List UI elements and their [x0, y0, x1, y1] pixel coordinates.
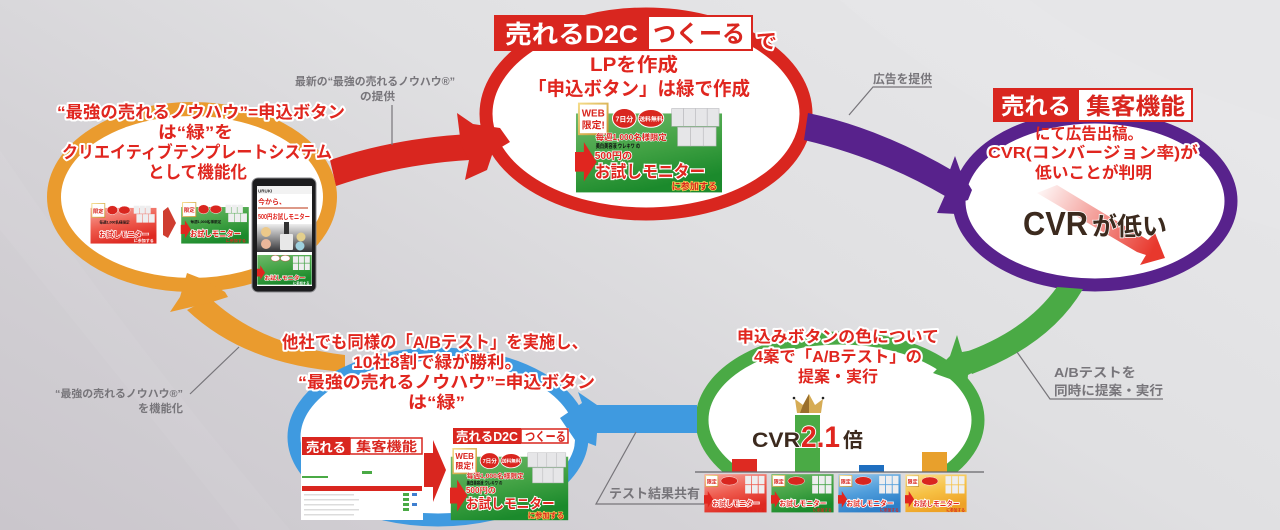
ad card: green in blue panel: 送料無料 — [502, 458, 521, 465]
arrow: screenshot to LP — [424, 440, 446, 502]
ad card: red variant — [704, 474, 767, 513]
text: green panel — [737, 327, 939, 386]
ad card: orange variant — [905, 474, 967, 512]
annotation: simultaneous A/B test — [1017, 352, 1163, 399]
ad card: green in blue panel: 500円の — [466, 486, 496, 495]
panel: shukyaku kino screenshot: 集客機能 — [356, 439, 417, 454]
panel: red ellipse — [486, 14, 806, 214]
ad card: green large: 送料無料 — [639, 115, 663, 123]
arrow: orange, blue panel to orange panel — [170, 273, 345, 372]
ad card: red before: お試しモニター — [99, 229, 149, 239]
arrow: blue, green panel to blue panel — [560, 392, 697, 472]
ad card: orange variant: お試しモニター — [913, 499, 960, 508]
ad card: green large: お試しモニター — [595, 163, 705, 182]
text: CVR 2.1x: CVR — [752, 429, 800, 452]
ad card: green variant: 限定 — [774, 478, 784, 485]
panel: blue ellipse — [294, 354, 582, 520]
ad card: blue variant: お試しモニター — [846, 499, 893, 508]
panel: green ellipse — [697, 332, 984, 472]
icon: downward arrow — [1037, 185, 1165, 265]
text: orange panel: “最強の売れるノウハウ”=申込ボタン — [57, 102, 345, 122]
text: blue panel — [282, 333, 595, 412]
panel: orange ellipse — [54, 109, 330, 285]
text: purple panel: にて広告出稿。 — [1035, 125, 1143, 143]
heading: D2C tsukuru badge — [494, 15, 777, 53]
text: orange panel: として機能化 — [148, 162, 247, 182]
panel: shukyaku kino screenshot: 売れる — [306, 440, 346, 455]
heading: D2C tsukuru badge: で — [756, 31, 777, 53]
arrow: purple, red panel to purple panel — [804, 113, 972, 214]
ad card: red before: 毎週1,000名様限定 — [99, 220, 130, 225]
ad card: blue variant: 限定 — [841, 478, 851, 485]
ad card: green after: に参加する — [226, 237, 246, 243]
text: CVR 2.1x: 2.1 — [801, 421, 840, 454]
text: blue panel: 他社でも同様の「A/Bテスト」を実施し、 — [282, 333, 588, 352]
annotation: latest know-how provided: 最新の“最強の売れるノウハウ®” — [295, 74, 455, 88]
ad card: phone screen: お試しモニター — [264, 274, 306, 282]
ad card: red variant: に参加する — [746, 508, 765, 513]
ad card: red before: に参加する — [134, 237, 154, 243]
heading: D2C tsukuru small badge: つくーる — [525, 430, 566, 444]
annotation: latest know-how provided — [295, 74, 455, 145]
panel: shukyaku kino screenshot — [301, 436, 423, 520]
text: CVR is low: が低い — [1092, 212, 1167, 241]
annotation: test result sharing: テスト結果共有 — [609, 486, 700, 501]
arrow: red to green card — [163, 207, 176, 238]
heading: shukyaku kino badge: 売れる — [1001, 93, 1071, 119]
ad card: green large: に参加する — [672, 180, 717, 191]
ad card: green in blue panel — [450, 448, 568, 520]
ad card: green in blue panel: に参加する — [528, 511, 564, 520]
text: red panel — [528, 53, 750, 100]
ad card: green variant — [771, 474, 834, 513]
icon: smartphone: 500円お試しモニター — [258, 212, 310, 221]
heading: D2C tsukuru small badge — [452, 428, 569, 444]
ad card: green large: 7日分 — [616, 114, 633, 123]
ad card: green after: 毎週1,000名様限定 — [190, 219, 222, 224]
panel: purple ellipse — [959, 117, 1231, 285]
ad card: green in blue panel: WEB — [455, 452, 474, 461]
heading: D2C tsukuru badge: つくーる — [653, 21, 745, 48]
ad card: blue variant: に参加する — [880, 508, 899, 513]
text: red panel: LPを作成 — [590, 53, 678, 76]
ad card: green variant: お試しモニター — [779, 499, 826, 508]
ad card: green after — [180, 202, 249, 244]
text: blue panel: 10社8割で緑が勝利。 — [353, 352, 522, 372]
ad card: red variant: お試しモニター — [712, 499, 759, 508]
ad card: phone screen — [257, 255, 312, 285]
text: blue panel: “最強の売れるノウハウ”=申込ボタン — [298, 372, 595, 392]
annotation: know-how as function: を機能化 — [138, 401, 183, 415]
arrow: red, orange panel to red panel — [330, 113, 510, 186]
ad card: red before: 限定 — [93, 207, 104, 215]
ad card: green large: 限定! — [582, 118, 605, 131]
ad card: green in blue panel: 毎週1,000名様限定 — [467, 471, 524, 480]
annotation: simultaneous A/B test: 同時に提案・実行 — [1054, 383, 1163, 398]
text: red panel: 「申込ボタン」は緑で作成 — [528, 77, 750, 100]
ad card: red variant: 限定 — [707, 478, 717, 485]
text: orange panel — [57, 102, 345, 182]
arrow: green, purple panel to green panel — [933, 287, 1083, 387]
heading: shukyaku kino badge — [993, 88, 1192, 122]
icon: crown — [793, 394, 824, 413]
ad card: green in blue panel: 7日分 — [483, 457, 497, 465]
text: CVR is low: CVR — [1023, 205, 1088, 242]
text: purple panel — [988, 125, 1198, 182]
heading: shukyaku kino badge: 集客機能 — [1086, 93, 1185, 119]
ad card: green after: 限定 — [184, 206, 195, 214]
heading: D2C tsukuru small badge: 売れるD2C — [456, 429, 518, 444]
text: blue panel: は“緑” — [408, 393, 465, 412]
text: purple panel: 低いことが判明 — [1035, 163, 1152, 182]
annotation: ad provided — [849, 71, 932, 115]
ad card: green in blue panel: 美白美容液 ウレキワ の — [467, 480, 503, 487]
annotation: simultaneous A/B test: A/Bテストを — [1054, 365, 1136, 380]
ad card: green large — [575, 102, 722, 192]
annotation: latest know-how provided: の提供 — [360, 89, 395, 103]
annotation: test result sharing — [596, 432, 705, 504]
ad card: green large: WEB — [582, 108, 605, 119]
heading: D2C tsukuru badge: 売れるD2C — [505, 21, 638, 49]
ad card: blue variant — [838, 474, 901, 513]
text: green panel: 提案・実行 — [798, 368, 878, 386]
text: purple panel: CVR(コンバージョン率)が — [988, 143, 1198, 162]
ad card: red before — [90, 203, 156, 244]
icon: smartphone: 今から、 — [258, 197, 286, 206]
ad card: green after: お試しモニター — [190, 229, 241, 239]
icon: smartphone — [252, 178, 316, 292]
ad card: green large: 毎週1,000名様限定 — [596, 132, 667, 142]
text: green panel: 申込みボタンの色について — [737, 327, 939, 346]
ad card: phone screen: に参加する — [293, 280, 309, 285]
annotation: know-how as function: “最強の売れるノウハウ®” — [55, 387, 183, 400]
text: CVR 2.1x: 倍 — [843, 429, 863, 452]
text: orange panel: は“緑”を — [158, 123, 233, 142]
text: CVR is low — [1023, 205, 1167, 242]
annotation: know-how as function — [55, 347, 239, 415]
icon: smartphone: URUKI — [258, 188, 272, 194]
ad card: green in blue panel: 限定! — [455, 462, 474, 471]
ad card: green in blue panel: お試しモニター — [466, 496, 555, 511]
text: CVR 2.1x — [752, 421, 863, 454]
ad card: orange variant: に参加する — [946, 507, 965, 512]
text: green panel: 4案で「A/Bテスト」の — [754, 348, 922, 366]
text: orange panel: クリエイティブテンプレートシステム — [62, 142, 332, 162]
ad card: orange variant: 限定 — [908, 479, 918, 486]
ad card: green large: 500円の — [595, 150, 632, 162]
bar chart: CVR by button colour — [695, 415, 984, 472]
ad card: green large: 美白美容液 ウレキワ の — [596, 142, 640, 150]
annotation: ad provided: 広告を提供 — [873, 71, 932, 86]
ad card: green variant: に参加する — [813, 508, 832, 513]
